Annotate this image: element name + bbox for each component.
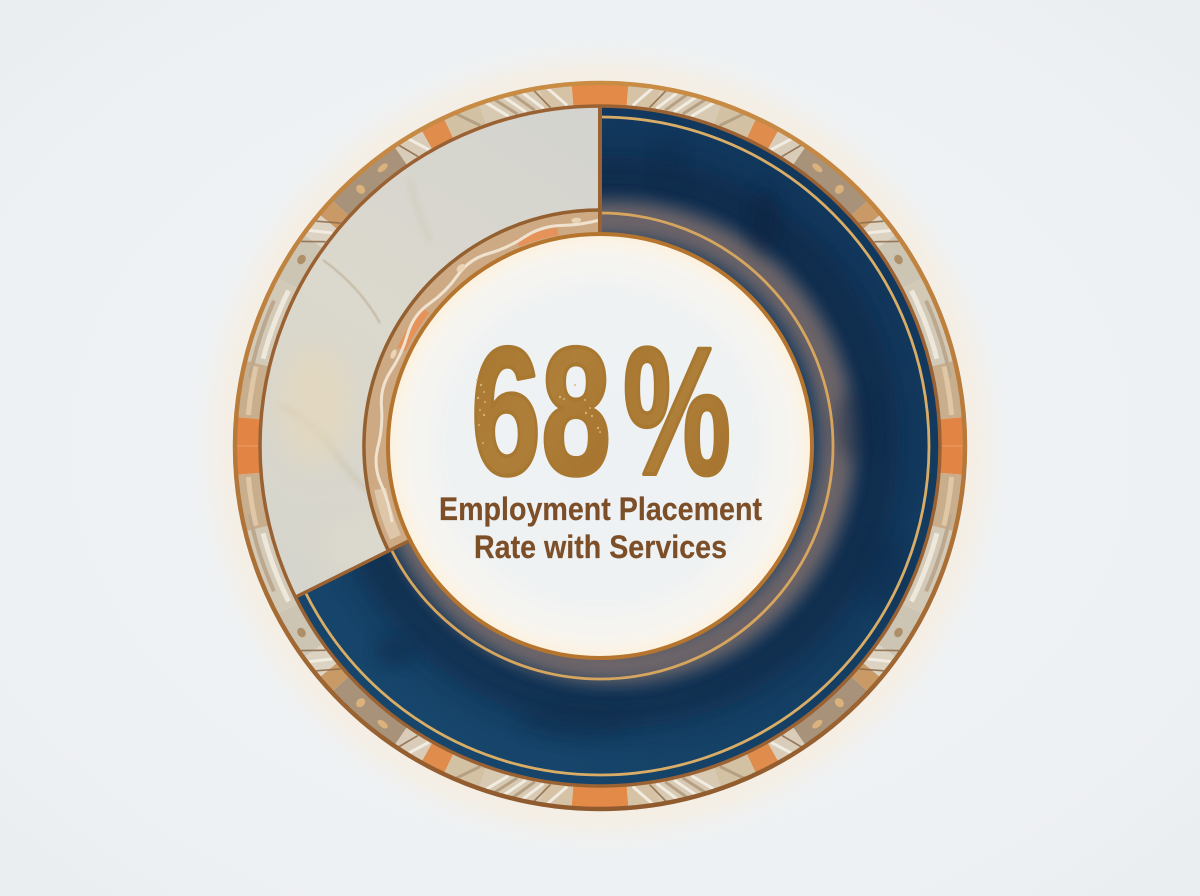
segment: remaining 32 percent marble	[260, 106, 600, 597]
centre hole	[388, 234, 812, 658]
donut chart: 68 percent	[235, 83, 965, 809]
gold speckles on digits	[476, 379, 601, 444]
big number: 68%: 68	[471, 309, 611, 513]
caption: Rate with Services	[474, 529, 727, 565]
outer ornamental band	[243, 86, 957, 806]
gold line: inner	[367, 213, 833, 679]
warm glow around ring	[228, 76, 972, 816]
caption: Employment Placement	[439, 491, 762, 527]
big number: 68%: %	[623, 309, 731, 513]
caption	[439, 491, 762, 565]
gold line: outer	[271, 117, 929, 775]
segment: 68 percent navy	[271, 106, 940, 786]
ring outlines and dividers	[235, 83, 965, 809]
inner ornamental band	[376, 217, 824, 670]
